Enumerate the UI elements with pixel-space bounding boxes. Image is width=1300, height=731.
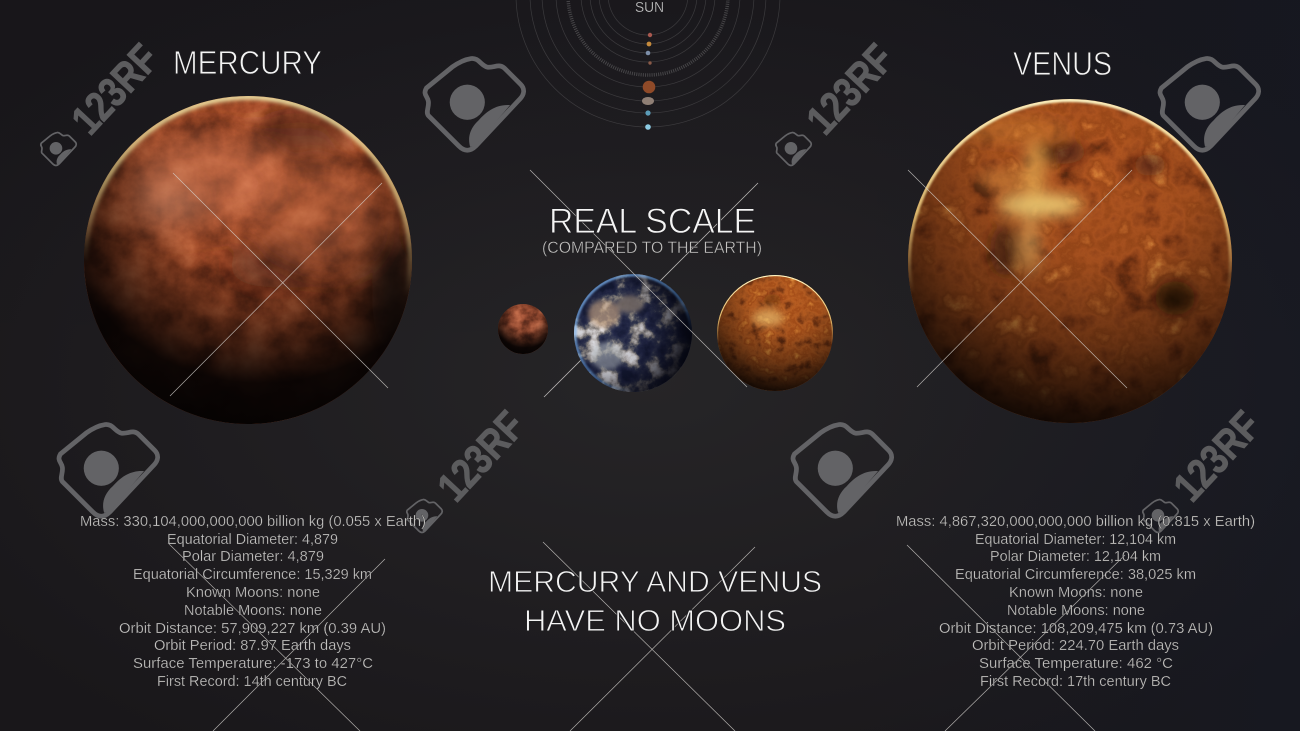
title: Venus: VENUS xyxy=(1013,45,1112,82)
surface highlights xyxy=(752,294,784,326)
orbit planets xyxy=(642,33,655,130)
line crosses xyxy=(168,170,1132,731)
facts: Venus: Mass: 4,867,320,000,000,000 billion kg (0.815 x Earth) xyxy=(896,514,1255,530)
facts: Venus: Orbit Distance: 108,209,475 km (0.73 AU) xyxy=(939,621,1213,637)
facts: Mercury: First Record: 14th century BC xyxy=(157,674,347,690)
heading: no moons message xyxy=(488,564,822,638)
facts: Mercury: Surface Temperature: -173 to 427°C xyxy=(133,656,373,672)
planet: Mercury large xyxy=(84,96,412,424)
facts: Venus: First Record: 17th century BC xyxy=(980,674,1171,690)
planet: Earth to scale xyxy=(574,274,692,392)
heading: Real scale: REAL SCALE xyxy=(549,202,756,241)
surface highlights xyxy=(130,117,412,355)
heading: no moons message: HAVE NO MOONS xyxy=(524,603,786,638)
watermark: 123RF marks xyxy=(41,35,1270,533)
surface highlights xyxy=(950,116,1195,315)
facts: Mercury: Polar Diameter: 4,879 xyxy=(182,549,324,565)
title: Mercury: MERCURY xyxy=(173,44,322,81)
watermark: large camera icons xyxy=(59,58,1259,516)
facts: Mercury: Orbit Distance: 57,909,227 km (0.39 AU) xyxy=(119,621,386,637)
planet: Venus large xyxy=(908,99,1232,423)
facts: Mercury: Notable Moons: none xyxy=(184,603,322,619)
subheading: compared to the Earth: (COMPARED TO THE EARTH) xyxy=(542,238,762,257)
facts: Mercury: Equatorial Diameter: 4,879 xyxy=(167,532,338,548)
facts: Venus: Equatorial Circumference: 38,025 km xyxy=(955,567,1196,583)
facts: Venus xyxy=(896,514,1255,690)
orbit rings xyxy=(516,0,780,127)
facts: Mercury: Equatorial Circumference: 15,329 km xyxy=(133,567,372,583)
facts: Mercury: Mass: 330,104,000,000,000 billion kg (0.055 x Earth) xyxy=(80,514,426,530)
solar system orbit diagram xyxy=(516,0,780,130)
facts: Mercury xyxy=(80,514,426,690)
facts: Mercury: Orbit Period: 87.97 Earth days xyxy=(154,638,351,654)
facts: Mercury: Known Moons: none xyxy=(186,585,320,601)
line cross: behind central planets xyxy=(544,183,758,397)
planet: Mercury to scale xyxy=(498,304,548,354)
facts: Venus: Notable Moons: none xyxy=(1007,603,1145,619)
planet: Venus to scale xyxy=(717,275,833,391)
facts: Venus: Equatorial Diameter: 12,104 km xyxy=(975,532,1176,548)
facts: Venus: Surface Temperature: 462 °C xyxy=(979,656,1173,672)
facts: Venus: Polar Diameter: 12,104 km xyxy=(990,549,1161,565)
heading: no moons message: MERCURY AND VENUS xyxy=(488,564,822,599)
landmass highlights xyxy=(588,295,644,370)
facts: Venus: Known Moons: none xyxy=(1009,585,1143,601)
facts: Venus: Orbit Period: 224.70 Earth days xyxy=(972,638,1179,654)
